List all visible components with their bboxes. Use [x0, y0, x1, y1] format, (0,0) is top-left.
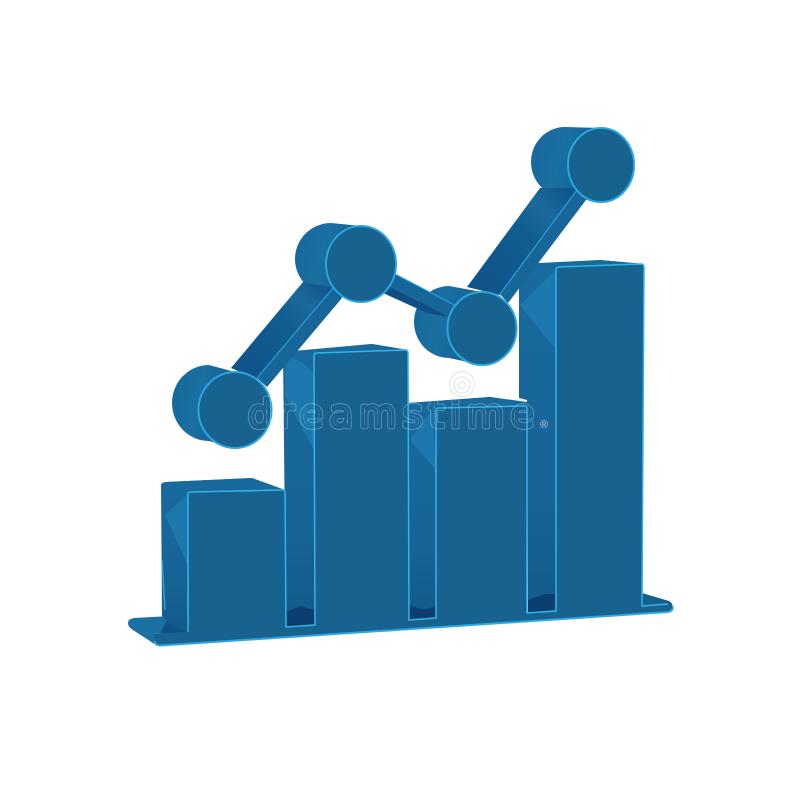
link: node 3 to node 4 — [467, 188, 586, 303]
link: node 1 to node 2 — [231, 282, 342, 387]
watermark registered mark: ® — [540, 419, 548, 431]
bar fronts joined to base front — [154, 264, 673, 646]
watermark logo spiral — [450, 372, 474, 396]
bar 1 side and top — [161, 478, 285, 632]
bar 4 side and top — [519, 260, 644, 613]
base plate back surface — [128, 593, 673, 645]
bar 2 side and top — [283, 344, 408, 627]
node 3 back cylinder — [414, 286, 482, 365]
node 1 front face — [198, 372, 272, 448]
node 1 back cylinder — [172, 365, 235, 448]
watermark text outline — [248, 396, 534, 430]
node 4 back cylinder — [531, 127, 601, 202]
bar 3 side and top — [408, 397, 527, 620]
node 3 front face — [448, 292, 516, 365]
node 2 back cylinder — [295, 223, 361, 301]
infographic: 3D bar and line chart icon — [128, 127, 674, 646]
node 4 front face — [568, 128, 634, 202]
node 2 front face — [326, 226, 396, 302]
link: node 2 to node 3 — [383, 274, 458, 317]
